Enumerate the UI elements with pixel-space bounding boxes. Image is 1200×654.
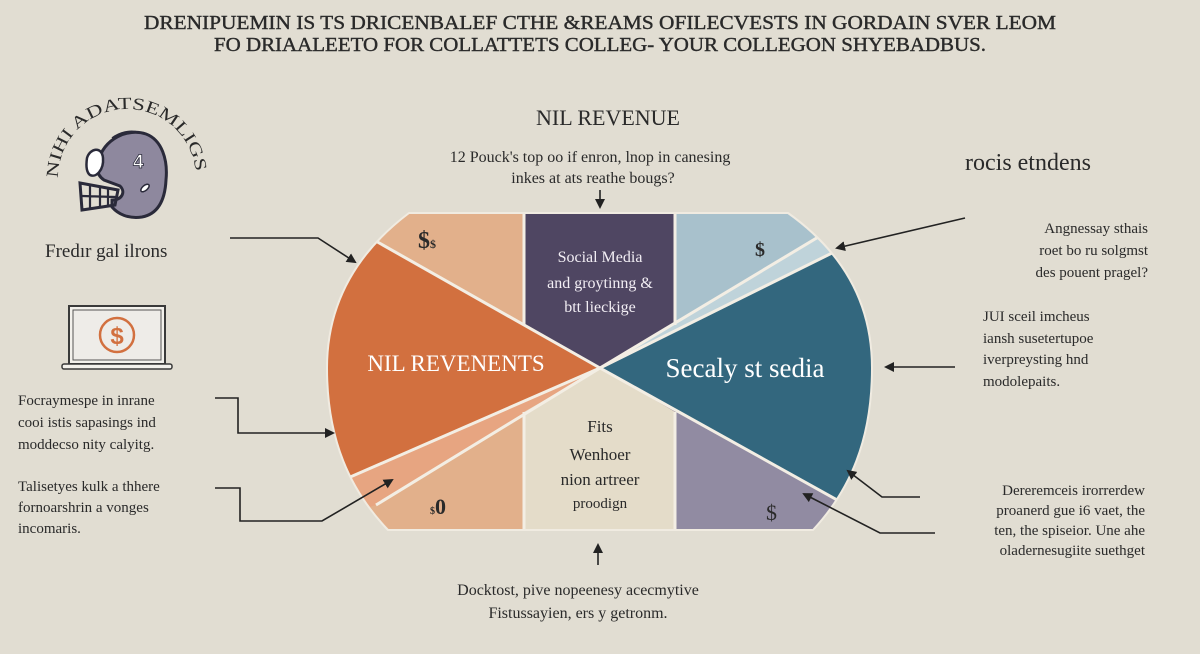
pie labels: Fits <box>587 417 613 436</box>
pie labels: $$ <box>418 228 436 254</box>
right text block 2: JUI sceil imcheus <box>983 309 1090 325</box>
right text block 3 <box>994 483 1145 559</box>
icon: helmet <box>46 98 206 219</box>
pie labels: Secaly st sedia <box>666 353 824 383</box>
left text block 2 <box>18 479 160 537</box>
right text block 1: Angnessay sthais <box>1044 221 1148 237</box>
left text block 1: Focraymespe in inrane <box>18 393 155 409</box>
right text block 3: Dereremceis irorrerdew <box>1002 483 1145 499</box>
title: FO DRIAALEETO FOR COLLATTETS COLLEG- YOUR COLLEGON SHYEBADBUS. <box>214 34 986 56</box>
pie labels: btt lieckige <box>564 299 636 316</box>
right text block 3: ten, the spiseior. Une ahe <box>994 523 1145 539</box>
title: DRENIPUEMIN IS TS DRICENBALEF CTHE &REAMS OFILECVESTS IN GORDAIN SVER LEOM <box>144 12 1056 34</box>
pie labels: $0 <box>430 494 446 519</box>
right text block 3: proanerd gue i6 vaet, the <box>996 503 1145 519</box>
pie labels: NIL REVENENTS <box>367 351 545 376</box>
bottom text <box>457 582 699 622</box>
right text block 2 <box>983 309 1093 390</box>
pie labels: $ <box>755 239 765 261</box>
right heading: rocis etndens <box>965 150 1091 176</box>
arrows <box>215 190 965 565</box>
center heading: NIL REVENUE <box>536 105 680 130</box>
right text block 1: roet bo ru solgmst <box>1039 243 1148 259</box>
pie labels: nion artreer <box>561 470 640 489</box>
right text block 2: iverpreysting hnd <box>983 352 1088 368</box>
left text block 2: incomaris. <box>18 521 81 537</box>
left text block 2: Talisetyes kulk a thhere <box>18 479 160 495</box>
left text block 2: fornoarshrin a vonges <box>18 500 149 516</box>
icon: laptop <box>62 306 172 369</box>
pie labels <box>367 228 824 525</box>
title <box>144 12 1056 56</box>
icon: helmet: NIHI ADATSEMLIGS <box>46 98 206 178</box>
bottom text: Docktost, pive nopeenesy acecmytive <box>457 582 699 599</box>
icon: laptop: $ <box>110 323 124 350</box>
right text block 2: iansh susetertupoe <box>983 330 1093 346</box>
pie labels: and groytinng & <box>547 275 653 292</box>
right text block 3: oladernesugiite suethget <box>1000 543 1145 559</box>
bottom text: Fistussayien, ers y getronm. <box>488 605 668 622</box>
right text block 1: des pouent pragel? <box>1036 265 1148 281</box>
pie labels: Social Media <box>558 249 642 266</box>
right text block 2: modolepaits. <box>983 374 1060 390</box>
left text: fredir: Fredır gal ilrons <box>45 241 167 262</box>
center heading: inkes at ats reathe bougs? <box>511 170 675 187</box>
pie labels: Wenhoer <box>570 445 631 464</box>
left text block 1: cooi istis sapasings ind <box>18 415 156 431</box>
icon: helmet: 4 <box>133 152 144 173</box>
left text block 1 <box>18 393 156 453</box>
center heading: 12 Pouck's top oo if enron, lnop in canesing <box>450 149 730 166</box>
pie labels: proodign <box>573 496 628 512</box>
left text block 1: moddecso nity calyitg. <box>18 437 154 453</box>
center heading <box>450 105 730 187</box>
right text block 1 <box>1036 221 1148 281</box>
pie chart <box>328 214 871 529</box>
pie labels: $ <box>766 500 777 525</box>
